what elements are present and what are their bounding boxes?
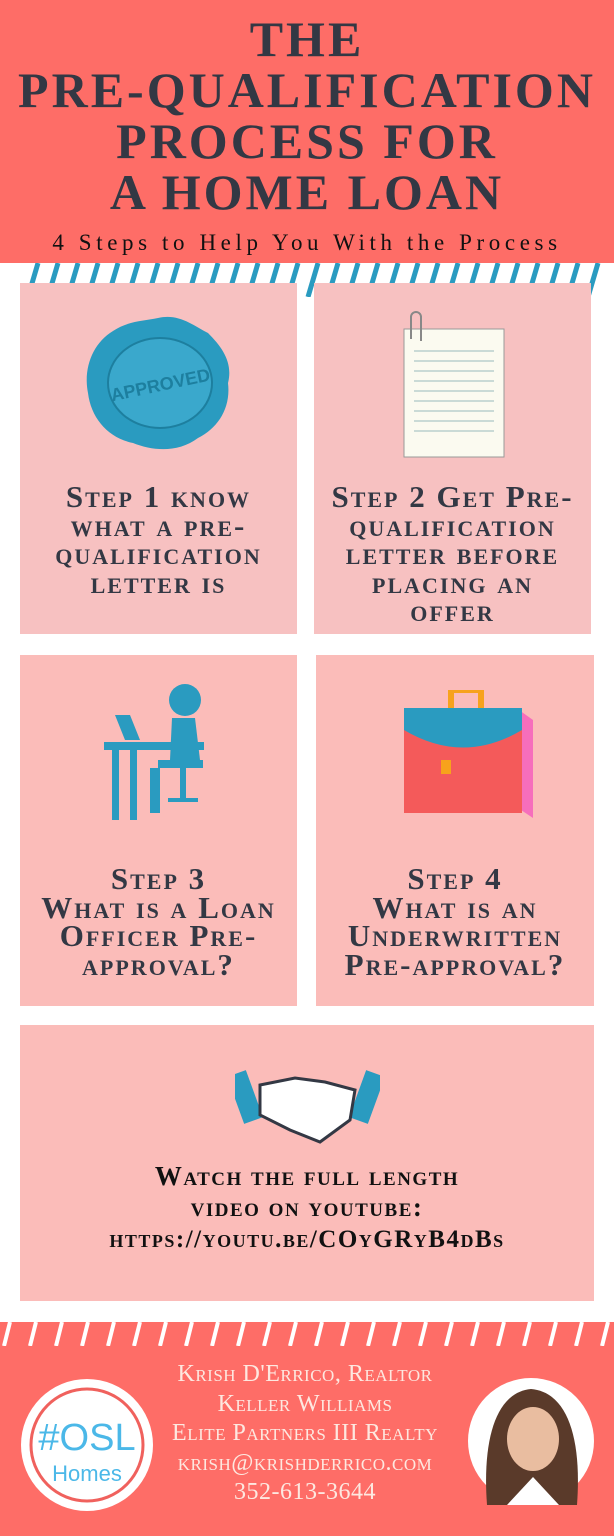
- logo: OSL Homes: #OSL: [38, 1417, 136, 1459]
- panel: step 1: [20, 283, 297, 634]
- contact text: [172, 1361, 438, 1505]
- step 3 text: What is a Loan: [41, 890, 276, 924]
- icon: briefcase: [404, 690, 533, 818]
- title: [18, 11, 596, 220]
- title: THE: [250, 11, 364, 67]
- logo: OSL Homes: [21, 1379, 153, 1511]
- step 4 text: What is an: [372, 890, 538, 924]
- photo placeholder: [468, 1378, 594, 1505]
- video text: Watch the full length: [155, 1161, 459, 1191]
- video text: https://youtu.be/COyGRyB4dBs: [109, 1226, 505, 1253]
- icon: approved seal: APPROVED: [109, 365, 212, 405]
- step 4 text: Step 4: [407, 861, 503, 896]
- video text: [109, 1161, 505, 1253]
- step 4 text: [345, 861, 565, 982]
- footer: [0, 1322, 614, 1536]
- step 2 text: qualification: [349, 508, 556, 542]
- header banner: [0, 0, 614, 263]
- step 1 text: letter is: [91, 564, 226, 600]
- logo: OSL Homes: Homes: [52, 1461, 122, 1486]
- title: PRE-QUALIFICATION: [18, 62, 596, 118]
- step 1 text: qualification: [55, 536, 262, 571]
- title: PROCESS FOR: [116, 113, 498, 169]
- panel: video callout: [20, 1025, 594, 1301]
- video text: video on youtube:: [191, 1192, 423, 1222]
- step 3 text: [41, 861, 276, 982]
- step 1 text: what a pre-: [71, 508, 246, 542]
- contact text: 352-613-3644: [234, 1479, 376, 1505]
- panel: step 4: [316, 655, 594, 1006]
- contact text: Elite Partners III Realty: [172, 1420, 438, 1446]
- step 2 text: offer: [410, 593, 495, 628]
- step 2 text: [331, 479, 574, 628]
- icon: handshake: [235, 1070, 380, 1144]
- step 2 text: Step 2 Get Pre-: [331, 479, 574, 514]
- step 1 text: [55, 479, 262, 600]
- step 3 text: approval?: [82, 946, 235, 982]
- panel: step 2: [314, 283, 591, 634]
- panel: step 3: [20, 655, 297, 1006]
- step 3 text: Step 3: [111, 861, 206, 896]
- icon: paper with clip: [404, 311, 504, 458]
- title: A HOME LOAN: [110, 164, 504, 220]
- step 4 text: Underwritten: [348, 918, 562, 953]
- step 1 text: Step 1 know: [66, 479, 251, 514]
- step 2 text: letter before: [346, 536, 559, 571]
- subtitle: 4 Steps to Help You With the Process: [52, 230, 562, 255]
- step 2 text: placing an: [372, 564, 533, 600]
- contact text: Krish D'Errico, Realtor: [177, 1361, 433, 1387]
- icon: approved seal: [86, 316, 230, 450]
- step 3 text: Officer Pre-: [60, 918, 257, 953]
- step 4 text: Pre-approval?: [345, 946, 565, 982]
- icon: person at desk: [104, 684, 204, 820]
- contact text: krish@krishderrico.com: [178, 1450, 432, 1476]
- contact text: Keller Williams: [218, 1390, 392, 1416]
